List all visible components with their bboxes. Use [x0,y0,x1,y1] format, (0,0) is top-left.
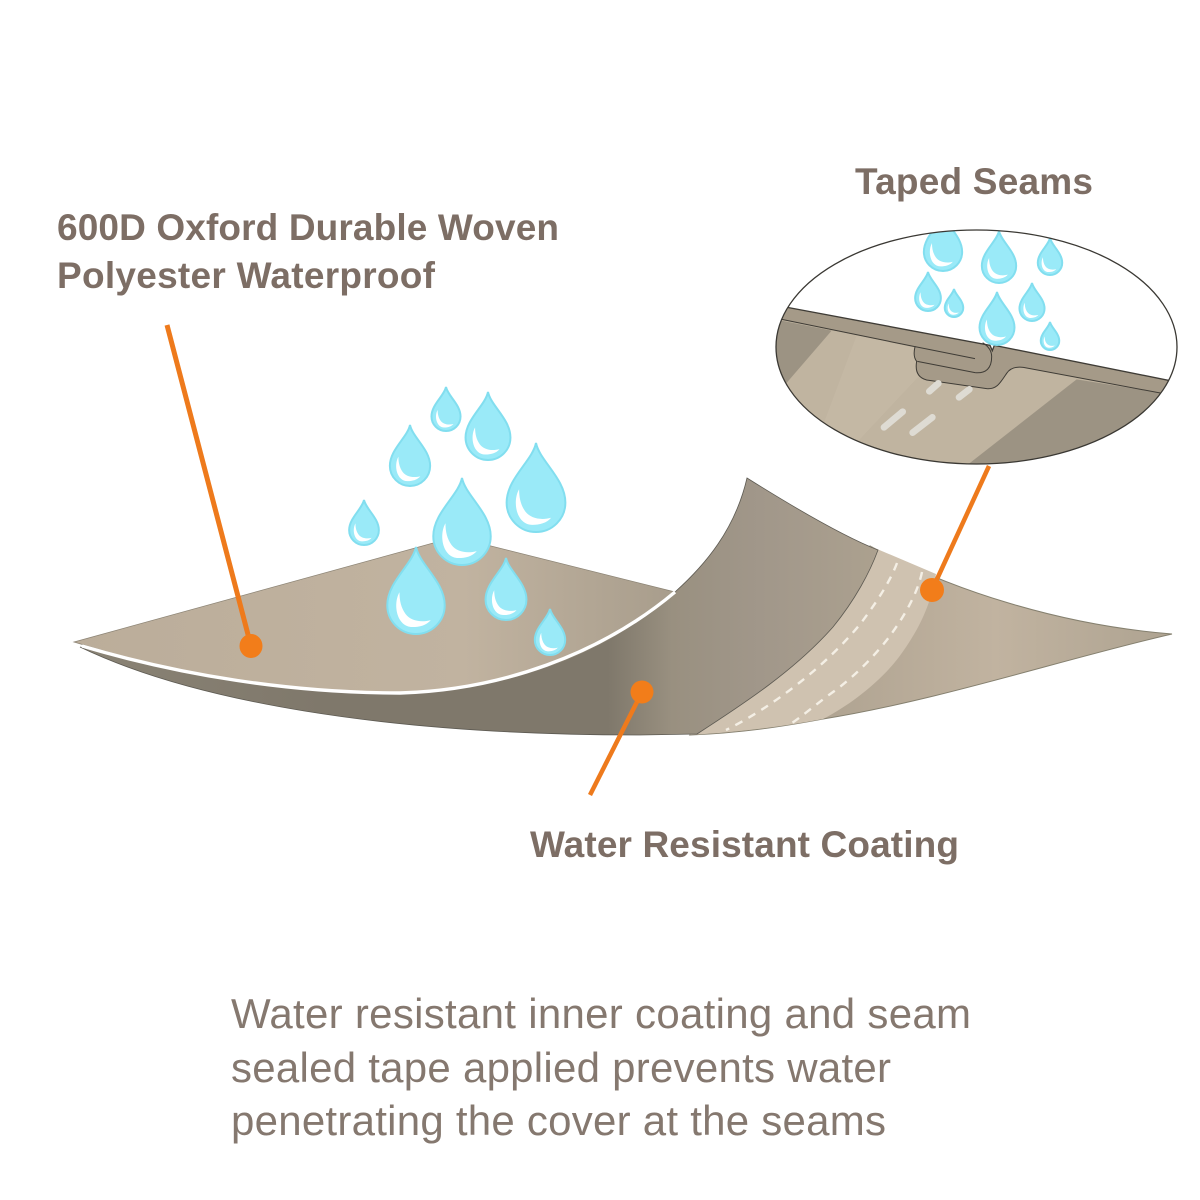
oval drop f [1019,283,1045,321]
water drops on fabric [349,387,565,655]
body text: sealed tape applied prevents water [231,1044,891,1091]
white edge of fold [82,592,675,693]
pointer: seam [920,466,989,602]
heading: Water Resistant Coating: Water Resistant Coating [530,824,959,865]
oval drop h [1041,322,1059,350]
pointer: coating [590,680,654,795]
drop 7 [387,547,445,634]
oval drop e [945,289,963,317]
drop 4 [507,443,565,532]
oval drop c [1038,238,1062,275]
oval drop g [980,292,1014,345]
oval drop d [915,272,941,311]
drop 5 [349,500,379,545]
fabric sheet illustration [74,478,1172,735]
body text: penetrating the cover at the seams [231,1097,886,1144]
heading: 600D Oxford fabric: 600D Oxford Durable Woven [57,207,559,248]
drop 2 [466,392,510,460]
drop 1 [431,387,461,431]
callout: taped seam close-up oval [775,229,1178,465]
seam band [690,546,936,735]
oval drop b [982,231,1016,283]
drop 3 [390,425,430,486]
heading: 600D Oxford fabric [57,207,559,296]
drop 9 [535,609,565,655]
drops in close-up [914,231,1064,351]
back layer: water resistant coating [80,478,878,735]
oval drop a [922,231,964,272]
heading: 600D Oxford fabric: Polyester Waterproof [57,255,436,296]
pointer: fabric [167,325,262,658]
body text: Water resistant inner coating and seam [231,990,971,1037]
seam cross-section [776,307,1168,464]
right section of outer fabric [690,546,1172,735]
front layer: outer fabric [74,537,675,693]
heading: Taped Seams: Taped Seams [855,161,1093,202]
drop 6 [433,478,491,565]
stitching [726,563,922,730]
body text [231,990,971,1144]
drop 8 [486,558,526,620]
